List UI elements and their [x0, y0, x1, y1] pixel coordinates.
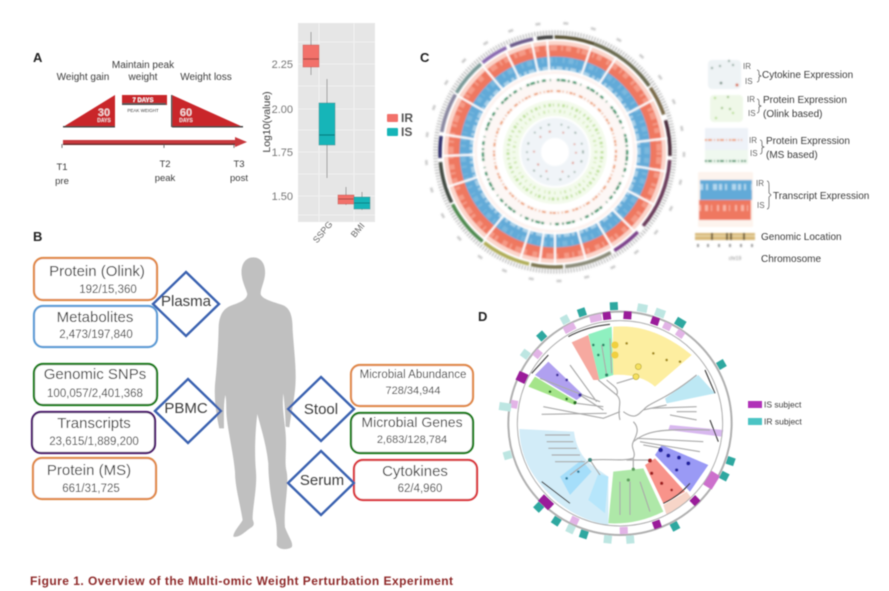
phase labels: Maintain peak — [112, 60, 175, 71]
thumbnail: MS — [705, 128, 748, 164]
phase labels — [57, 60, 232, 83]
box: Protein (MS): 661/31,725 — [62, 483, 120, 495]
legend: track labels — [743, 62, 869, 265]
legend: track labels: IR — [756, 179, 764, 188]
box: Metabolites — [34, 306, 157, 347]
icon: 30 days weight gain triangle: 30 — [98, 107, 110, 119]
y axis labels: 1.50 — [272, 191, 293, 203]
icon: 7 days peak weight banner — [122, 95, 167, 113]
legend: track labels: (MS based) — [766, 150, 818, 161]
IR and IS boxes for SSPG — [303, 32, 335, 178]
Olink protein ring — [508, 105, 602, 199]
thumbnail: transcript — [698, 172, 753, 227]
tree branches — [540, 338, 710, 515]
box: Genomic SNPs — [34, 364, 157, 405]
legend: track labels: Protein Expression — [763, 95, 847, 106]
box: Microbial Abundance: Microbial Abundance — [360, 369, 466, 381]
legend: IR and IS — [387, 111, 413, 139]
IR and IS boxes for BMI — [338, 187, 370, 210]
box: Microbial Genes — [351, 413, 473, 453]
box: Protein (MS) — [33, 458, 156, 499]
box: Metabolites: Metabolites — [57, 309, 133, 326]
phase labels: weight — [128, 72, 158, 83]
legend: track labels: IR — [743, 62, 751, 71]
icon: 30 days weight gain triangle: DAYS — [97, 118, 111, 124]
timepoint labels: peak — [155, 173, 176, 184]
x axis labels: BMI — [349, 221, 367, 239]
plot background — [298, 23, 375, 222]
box: Genomic SNPs: Genomic SNPs — [44, 366, 146, 383]
heading: panel B: B — [33, 229, 42, 244]
thumbnail: genomic location: chr19 — [729, 256, 741, 262]
x axis labels: SSPG — [311, 219, 335, 245]
legend: track labels: Chromosome — [761, 254, 821, 265]
panel D: microbial phylogenetic tree — [478, 302, 802, 544]
panel B: multi-omic sample overview — [32, 229, 477, 549]
heading: panel C: C — [420, 50, 430, 65]
timepoint labels: pre — [55, 176, 69, 187]
y axis labels: 1.75 — [272, 147, 293, 159]
icon: 60 days weight loss triangle: DAYS — [179, 118, 193, 124]
box: Cytokines: Cytokines — [382, 463, 448, 480]
legend: track labels: IS — [750, 149, 758, 158]
box: Microbial Genes: 2,683/128,784 — [377, 434, 447, 446]
legend thumbnails for the circos tracks — [695, 60, 755, 262]
diamond: Stool — [288, 377, 354, 441]
legend: track labels: IS — [748, 109, 756, 118]
box: Genomic SNPs: 100,057/2,401,368 — [47, 388, 143, 400]
clade wedges — [519, 326, 723, 525]
diamond: Serum: Serum — [300, 472, 344, 489]
faded IR subject markers — [499, 303, 666, 544]
legend: IS and IR subject — [748, 400, 802, 426]
box: Microbial Abundance: 728/34,944 — [385, 385, 441, 397]
box plot: Log10(value) of SSPG and BMI — [261, 23, 413, 245]
box: Transcripts — [32, 412, 155, 453]
timepoint labels: T2 — [159, 159, 171, 170]
legend: track labels: IR — [749, 136, 757, 145]
y axis labels — [272, 59, 293, 203]
legend: track labels: IS — [757, 201, 765, 210]
human silhouette — [215, 257, 296, 549]
figure caption: Figure 1. Overview of the Multi-omic Weight Perturbation Experiment — [30, 574, 453, 588]
box: Transcripts: Transcripts — [57, 415, 131, 432]
diamond: PBMC: PBMC — [164, 400, 208, 417]
legend: track labels: Transcript Expression — [773, 191, 869, 202]
icon: 7 days peak weight banner: 7 DAYS — [132, 98, 154, 104]
heading: panel D: D — [478, 309, 487, 324]
diamond: Stool: Stool — [304, 401, 338, 418]
box: Protein (MS): Protein (MS) — [47, 462, 131, 479]
legend: track labels: IR — [747, 95, 755, 104]
IR subject markers — [533, 302, 736, 539]
panel A: weight perturbation timeline — [33, 50, 248, 187]
x axis labels — [311, 219, 367, 245]
diamond: PBMC — [155, 379, 221, 443]
legend: track labels: Protein Expression — [766, 136, 850, 147]
thumbnail: Olink — [710, 95, 743, 122]
chromosome gaps — [443, 40, 666, 264]
legend: IR and IS: IR — [401, 111, 413, 125]
legend: IR and IS: IS — [401, 125, 412, 139]
panel C: circos plot — [392, 0, 869, 315]
circos rings — [392, 0, 718, 315]
thumbnail: cytokine — [708, 60, 741, 89]
arrow: timeline — [62, 137, 247, 148]
phase labels: Weight loss — [180, 72, 232, 83]
box: Microbial Abundance — [351, 365, 473, 406]
y axis labels: 2.25 — [272, 59, 293, 71]
legend: track labels: IS — [745, 77, 753, 86]
chromosome ring — [392, 0, 718, 315]
diamond: Serum — [288, 451, 354, 515]
MS protein rings — [483, 80, 627, 224]
diamond: Plasma — [153, 272, 219, 336]
legend: IS and IR subject: IR subject — [764, 416, 802, 426]
circular tree — [508, 312, 732, 535]
faded IS subject markers — [510, 313, 720, 534]
transcript expression rings IR and IS — [446, 44, 664, 260]
legend: IS and IR subject: IS subject — [764, 400, 802, 410]
box: Cytokines: 62/4,960 — [398, 483, 442, 495]
box: Protein (Olink): 192/15,360 — [79, 284, 137, 296]
heading: panel A: A — [33, 50, 43, 65]
outer rings — [508, 312, 732, 535]
legend: track labels: (Olink based) — [763, 109, 822, 120]
thumbnail: genomic location — [695, 233, 755, 262]
icon: 60 days weight loss triangle: 60 — [180, 107, 192, 119]
legend: track labels: Genomic Location — [761, 232, 842, 243]
IS subject markers — [515, 311, 701, 530]
outer tick marks and tiny labels — [426, 23, 684, 281]
timepoint labels: post — [230, 173, 248, 184]
diamond: Plasma: Plasma — [161, 293, 212, 310]
timepoint labels: T1 — [56, 162, 68, 173]
icon: 30 days weight gain triangle — [63, 95, 115, 128]
box: Protein (Olink) — [34, 258, 157, 300]
subject marker squares — [499, 302, 736, 544]
phase labels: Weight gain — [57, 72, 109, 83]
legend: track labels: Cytokine Expression — [762, 70, 853, 81]
timepoint labels — [55, 159, 248, 187]
y axis labels: 2.00 — [272, 104, 293, 116]
y axis title: Log10(value) — [261, 91, 273, 153]
box: Transcripts: 23,615/1,889,200 — [49, 436, 139, 448]
box: Protein (Olink): Protein (Olink) — [49, 263, 145, 280]
clade node dots — [549, 341, 690, 491]
box: Microbial Genes: Microbial Genes — [361, 414, 463, 430]
cytokine ring — [527, 124, 583, 180]
clade label arcs — [532, 324, 718, 503]
timepoint labels: T3 — [233, 159, 245, 170]
box: Cytokines — [354, 460, 477, 500]
icon: 7 days peak weight banner: PEAK WEIGHT — [127, 108, 159, 113]
box: Metabolites: 2,473/197,840 — [59, 329, 133, 341]
icon: 60 days weight loss triangle — [171, 95, 243, 128]
